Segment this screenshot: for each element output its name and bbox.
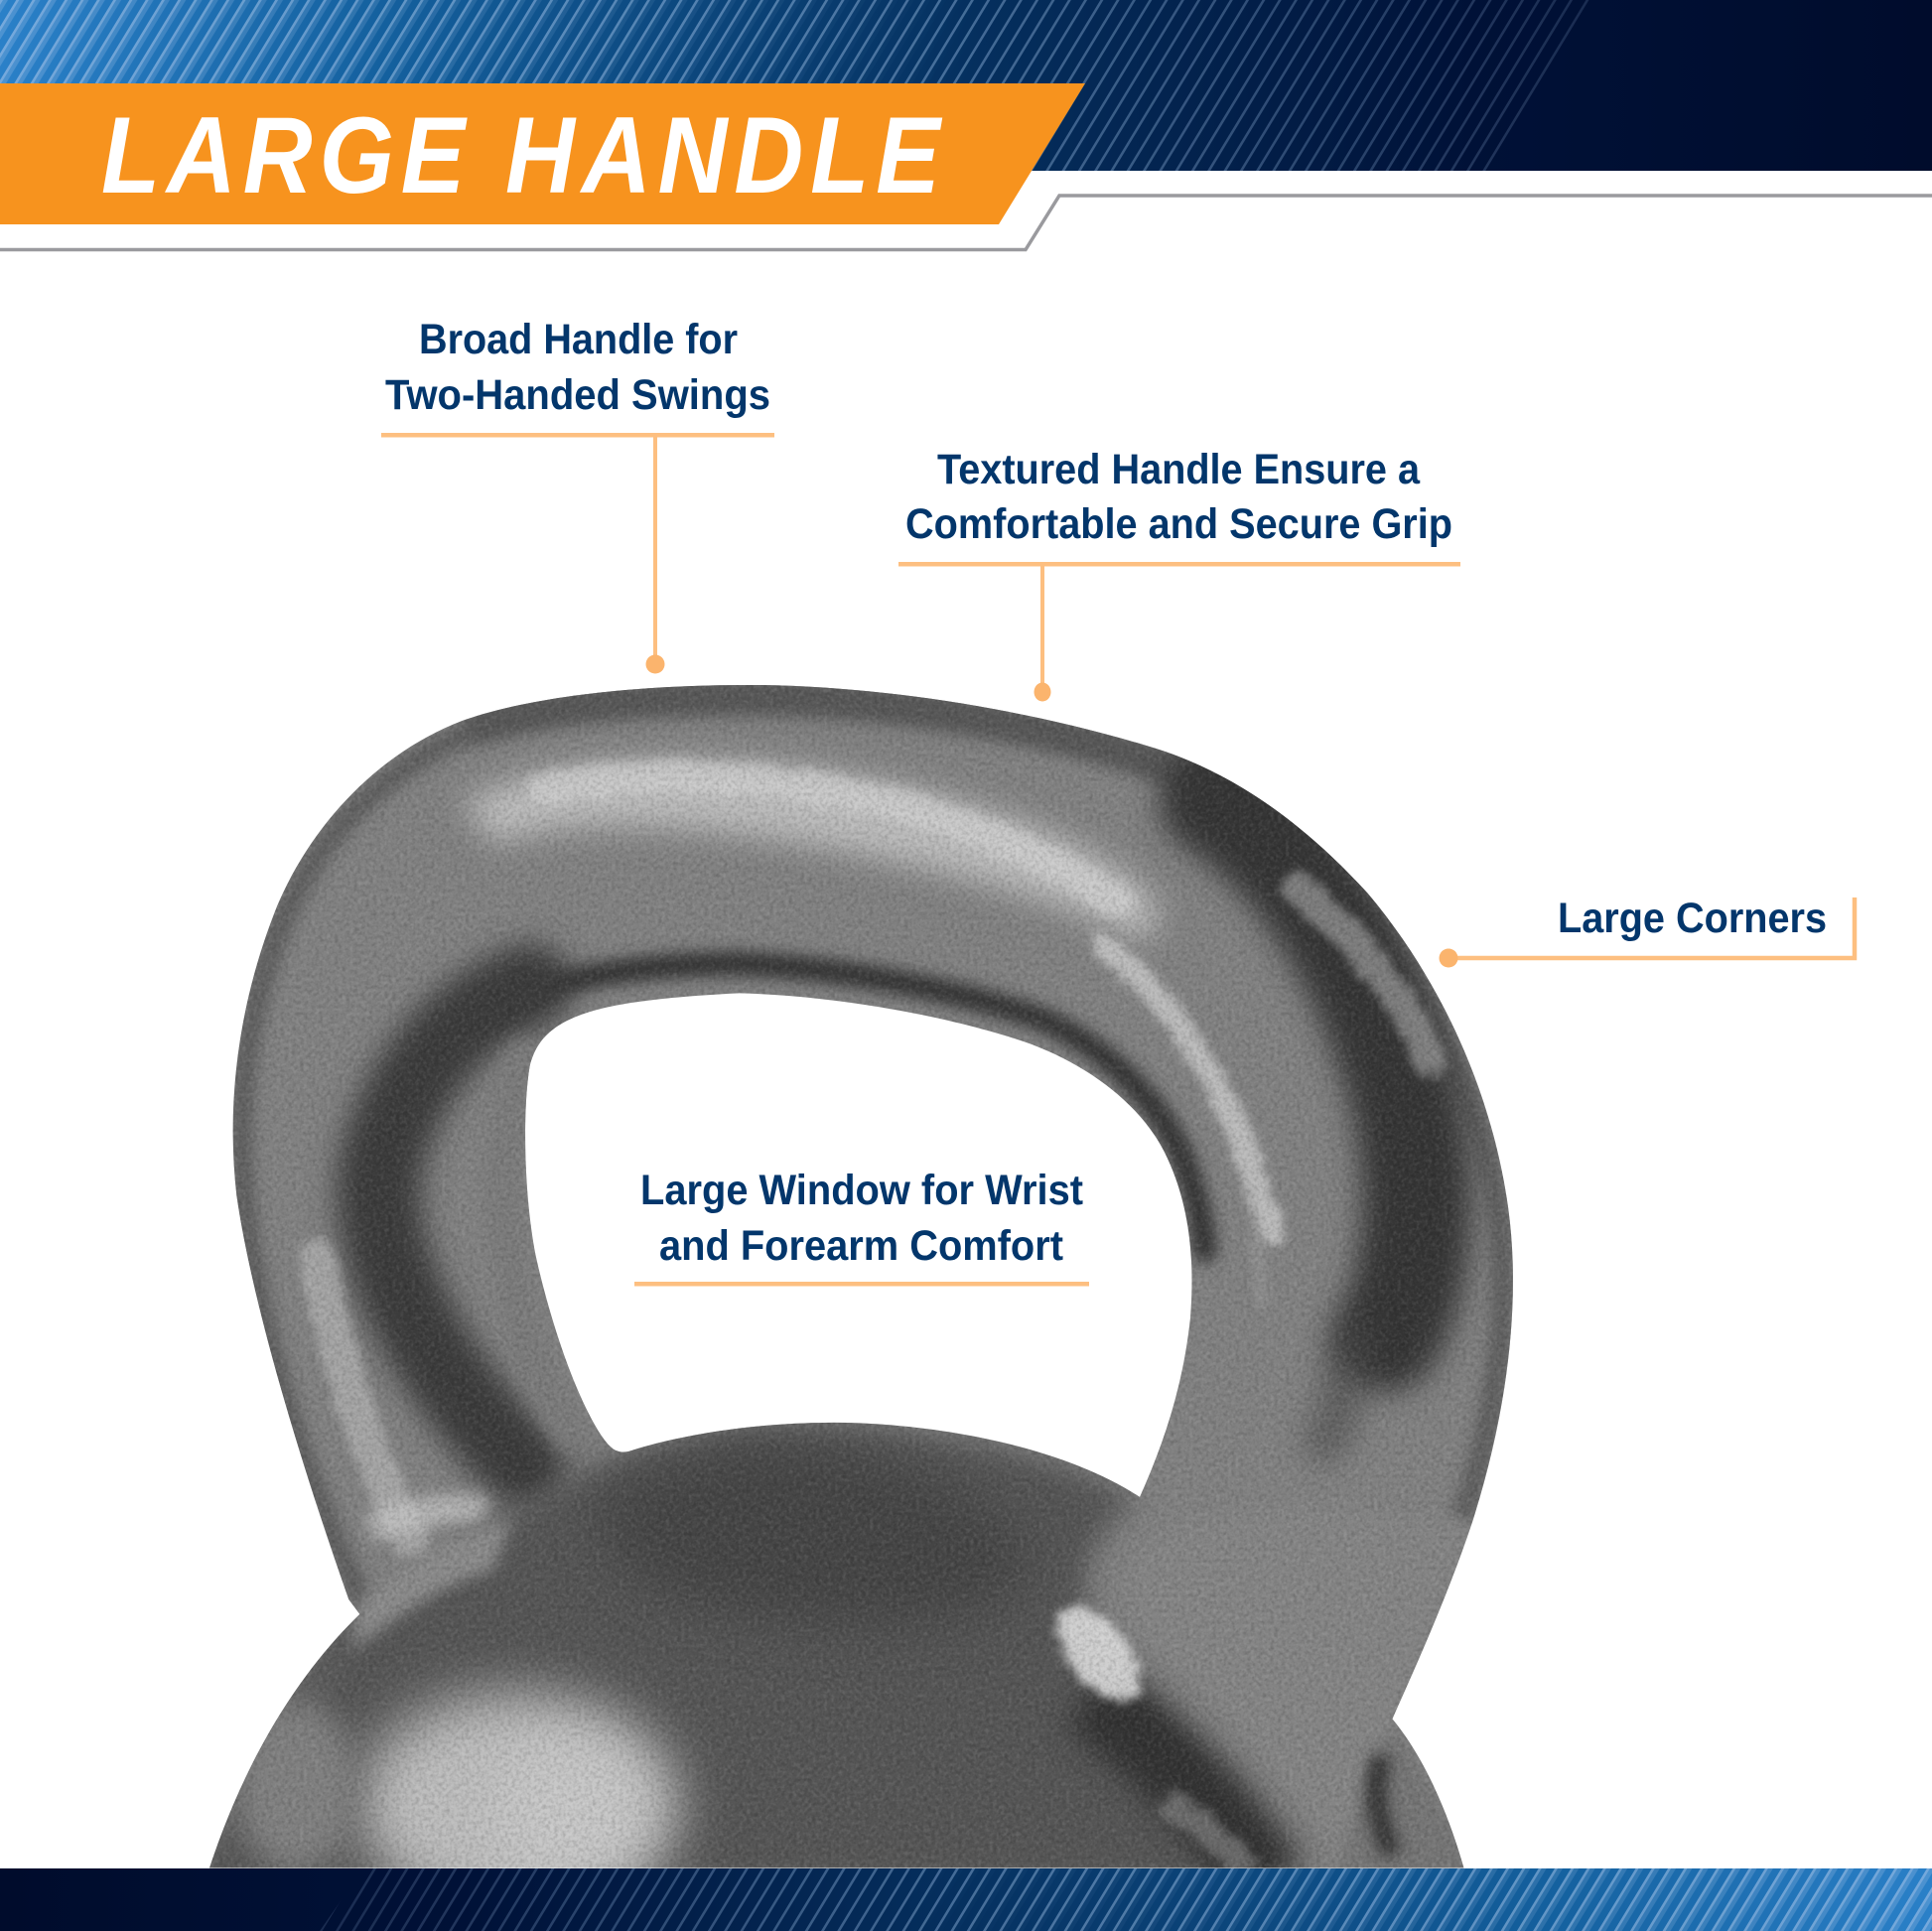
callout: textured handle: Comfortable and Secure Grip <box>905 500 1452 548</box>
surface texture <box>185 665 1540 1872</box>
handle base highlight <box>1048 1600 1148 1710</box>
bell highlight <box>357 1692 678 1918</box>
left speckled highlight <box>318 1257 413 1540</box>
callout: textured handle <box>898 446 1460 701</box>
callout text: Large Corners <box>1558 895 1827 942</box>
callout text: Broad Handle for <box>419 316 738 363</box>
callout: large corners <box>1440 895 1855 967</box>
bottom footer band <box>0 1868 1932 1931</box>
kettlebell photo illustration <box>185 665 1540 1918</box>
left dark stripe <box>378 986 530 1466</box>
inner window shadow top <box>486 964 1205 1251</box>
title banner <box>0 83 1085 224</box>
callout: large window: and Forearm Comfort <box>659 1222 1063 1270</box>
top header band <box>0 0 1932 171</box>
callout text: Large Window for Wrist <box>640 1167 1083 1214</box>
right dark band <box>1213 801 1417 1337</box>
bell dark body <box>198 1427 1269 1885</box>
callout: broad handle: Two-Handed Swings <box>385 371 770 419</box>
lower right column <box>1392 1519 1471 1722</box>
header rule line <box>0 196 1932 250</box>
callout: broad handle <box>381 316 774 673</box>
title: LARGE HANDLE <box>101 93 943 215</box>
callout: large window <box>634 1167 1089 1287</box>
handle highlight band <box>462 760 1159 939</box>
callout text: Textured Handle Ensure a <box>937 446 1421 493</box>
right specular streaks <box>1297 888 1430 1059</box>
